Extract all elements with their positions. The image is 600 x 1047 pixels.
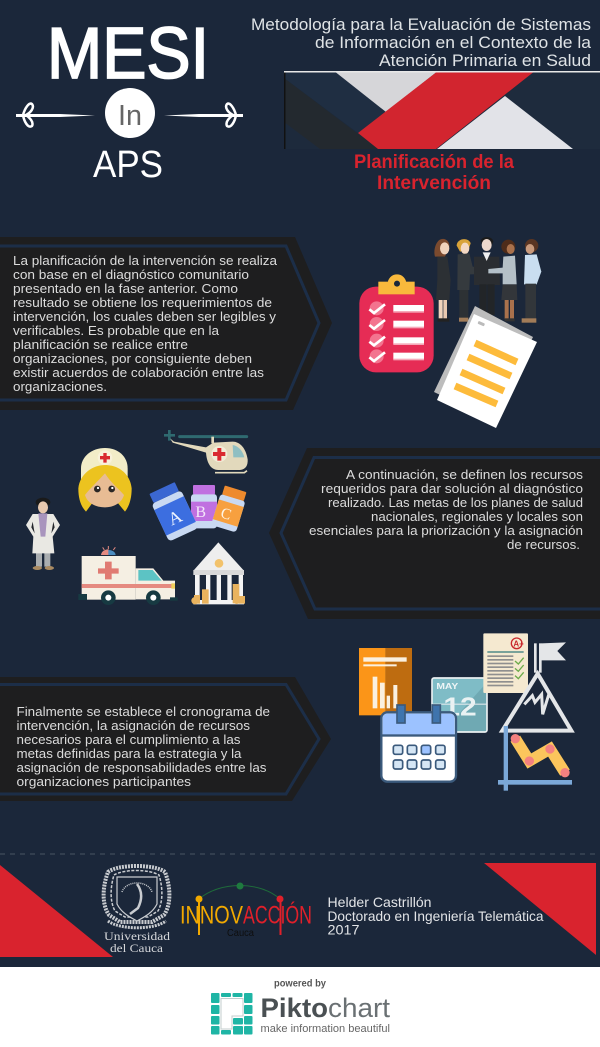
university name: Universidad bbox=[104, 929, 170, 943]
logo: MESI in APS bbox=[16, 14, 243, 186]
university name bbox=[104, 929, 170, 955]
icon: ambulance bbox=[78, 546, 178, 605]
schedule paragraph bbox=[16, 704, 270, 789]
resources paragraph: esenciales para la priorización y la asignación bbox=[309, 523, 583, 538]
panel: resources text bbox=[269, 448, 600, 619]
planning paragraph: existir acuerdos de colaboración entre las bbox=[13, 365, 265, 380]
circle with In: In bbox=[118, 100, 142, 132]
footer branding bbox=[0, 967, 600, 1047]
icon: calendar bbox=[381, 705, 456, 782]
planning paragraph: organizaciones. bbox=[13, 379, 107, 394]
resources paragraph bbox=[309, 467, 584, 552]
bottle A: A bbox=[165, 506, 185, 529]
author credit bbox=[328, 894, 544, 938]
schedule paragraph: Finalmente se establece el cronograma de bbox=[16, 704, 270, 719]
logo: Innovacción Cauca: ACCIÓN bbox=[243, 900, 312, 930]
icon: helicopter bbox=[164, 430, 248, 473]
planning paragraph: organizaciones, por consiguiente deben bbox=[13, 351, 252, 366]
logo word MESI: MESI bbox=[47, 14, 209, 94]
icon: date card: 12 bbox=[443, 692, 477, 722]
planning paragraph: con base en el diagnóstico comunitario bbox=[13, 267, 249, 282]
resources paragraph: A continuación, se definen los recursos bbox=[346, 467, 584, 482]
planning paragraph: resultado se obtiene los requerimientos de bbox=[13, 295, 272, 310]
logo word APS: APS bbox=[93, 144, 163, 186]
tagline: make information beautiful bbox=[260, 1023, 390, 1035]
bottle B: B bbox=[195, 504, 206, 521]
icon: Piktochart mosaic bbox=[211, 993, 252, 1034]
icon: date card bbox=[432, 678, 487, 732]
author credit: Helder Castrillón bbox=[328, 894, 432, 910]
icon: vitamin bottles bbox=[147, 481, 248, 542]
header banner bbox=[284, 71, 600, 149]
icon: graded exam: A+ bbox=[513, 639, 524, 648]
panel: planning text bbox=[0, 237, 332, 410]
planning paragraph: presentado en la fase anterior. Como bbox=[13, 281, 238, 296]
icon: mountain with flag bbox=[502, 642, 571, 731]
section heading: Intervención bbox=[377, 173, 491, 194]
footer triangle left bbox=[0, 865, 113, 957]
icon: nurse bbox=[78, 448, 132, 512]
person 3 bbox=[474, 237, 500, 315]
author credit: Doctorado en Ingeniería Telemática bbox=[328, 908, 544, 924]
person 2 bbox=[457, 239, 487, 322]
icon: business people shaking hands bbox=[434, 237, 541, 323]
planning paragraph: intervención, los cuales deben ser legibles y bbox=[13, 309, 277, 324]
section heading bbox=[354, 152, 514, 194]
schedule paragraph: organizaciones participantes bbox=[16, 774, 192, 789]
circle with In bbox=[105, 88, 155, 138]
header title: Metodología para la Evaluación de Sistemas bbox=[251, 15, 591, 34]
right arrow ornament bbox=[164, 104, 243, 127]
panel: schedule text bbox=[0, 677, 331, 801]
footer triangle right bbox=[484, 863, 596, 955]
icon: orange report bbox=[359, 648, 412, 715]
author credit: 2017 bbox=[328, 922, 360, 938]
left arrow ornament bbox=[16, 104, 95, 127]
person 1 bbox=[434, 239, 451, 322]
header title: de Información en el Contexto de la bbox=[315, 33, 592, 52]
resources paragraph: requeridos para dar solución al diagnóstico bbox=[321, 481, 583, 496]
planning paragraph bbox=[13, 253, 278, 394]
logo: Innovacción Cauca: INNOV bbox=[180, 902, 243, 930]
icon: date card: MAY bbox=[436, 682, 459, 691]
Piktochart wordmark: Pikto bbox=[260, 993, 328, 1023]
resources paragraph: realizado. Las metas de los planes de salud bbox=[328, 495, 583, 510]
schedule paragraph: intervención, la asignación de recursos bbox=[16, 718, 251, 733]
schedule paragraph: asignación de responsabilidades entre las bbox=[16, 760, 267, 775]
resources paragraph: nacionales, regionales y locales son bbox=[371, 509, 583, 524]
section heading: Planificación de la bbox=[354, 152, 514, 173]
logo: Innovacción Cauca bbox=[180, 882, 312, 939]
schedule paragraph: necesarios para el cumplimiento a las bbox=[16, 732, 241, 747]
planning paragraph: La planificación de la intervención se realiza bbox=[13, 253, 278, 268]
header title bbox=[251, 15, 592, 70]
logo: Universidad del Cauca bbox=[104, 866, 170, 955]
Piktochart wordmark end: chart bbox=[328, 993, 391, 1023]
university crest bbox=[104, 866, 169, 928]
icon: checklist clipboard bbox=[359, 274, 434, 372]
person 5 bbox=[522, 239, 541, 323]
person 4 bbox=[488, 240, 517, 321]
icon: line chart bbox=[498, 726, 572, 791]
university name: del Cauca bbox=[110, 941, 164, 955]
planning paragraph: planificación se realice entre bbox=[13, 337, 188, 352]
icon: document with yellow lines bbox=[434, 306, 537, 428]
icon: doctor bbox=[26, 498, 60, 570]
icon: bank with coins bbox=[191, 542, 245, 604]
logo: Innovacción Cauca: Cauca bbox=[227, 928, 254, 939]
header title: Atención Primaria en Salud bbox=[379, 51, 591, 70]
resources paragraph: de recursos. bbox=[507, 537, 580, 552]
powered by: powered by bbox=[274, 978, 326, 990]
schedule paragraph: metas definidas para la estrategia y la bbox=[16, 746, 242, 761]
icon: graded exam bbox=[483, 633, 528, 693]
bottle C: C bbox=[219, 505, 233, 524]
planning paragraph: verificables. Es probable que en la bbox=[13, 323, 220, 338]
